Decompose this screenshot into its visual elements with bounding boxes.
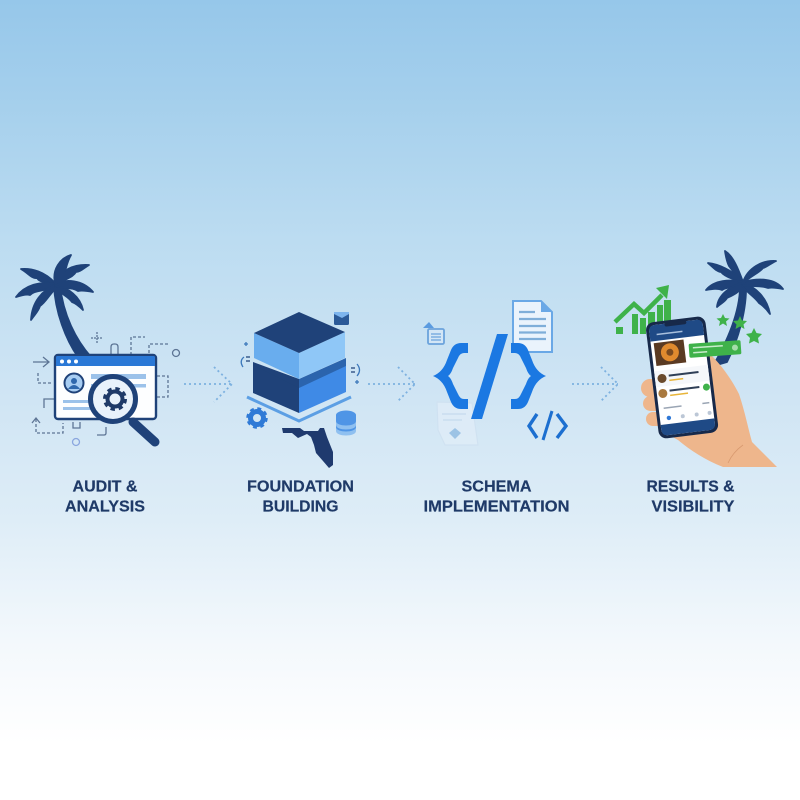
hand xyxy=(641,350,777,467)
code brackets xyxy=(433,343,546,409)
label: foundation building: BUILDING xyxy=(262,498,338,516)
florida map xyxy=(282,428,333,468)
label: results and visibility: RESULTS & xyxy=(646,478,734,496)
code slash xyxy=(471,334,508,419)
dotted arrow 1 xyxy=(184,367,232,402)
small signal marks xyxy=(241,342,360,384)
database icon xyxy=(336,410,356,436)
growth chart with arrow xyxy=(615,285,671,334)
base plate line xyxy=(247,397,351,421)
step 3: schema implementation illustration xyxy=(423,301,566,445)
small code icon xyxy=(529,411,566,440)
step 1: audit and analysis illustration xyxy=(16,255,180,446)
small upload document xyxy=(423,322,444,344)
stars xyxy=(716,314,762,344)
magnifying glass with gear xyxy=(90,376,155,442)
document top right xyxy=(513,301,552,352)
label: foundation building xyxy=(247,478,354,516)
faint document xyxy=(437,402,478,445)
upper block xyxy=(254,312,345,379)
label: audit and analysis xyxy=(65,478,145,516)
label: schema implementation: IMPLEMENTATION xyxy=(424,498,570,516)
palm tree right xyxy=(706,251,783,366)
label: schema implementation xyxy=(424,478,570,516)
browser window xyxy=(55,355,156,419)
label: results and visibility xyxy=(646,478,735,516)
label: audit and analysis: AUDIT & xyxy=(72,478,138,496)
lower block xyxy=(253,358,346,413)
decorative circuit lines xyxy=(32,332,180,446)
label: foundation building: FOUNDATION xyxy=(247,478,354,496)
step 2: foundation building illustration xyxy=(241,312,360,468)
green notification badge xyxy=(689,340,741,358)
mail icon xyxy=(334,312,349,325)
dotted arrow 2 xyxy=(368,367,415,401)
gear icon xyxy=(248,409,266,427)
palm tree left xyxy=(16,255,93,357)
smartphone xyxy=(645,316,719,439)
label: results and visibility: VISIBILITY xyxy=(652,498,735,516)
step 4: results and visibility illustration xyxy=(615,251,783,467)
dotted arrow 3 xyxy=(572,367,618,401)
label: audit and analysis: ANALYSIS xyxy=(65,498,145,516)
label: schema implementation: SCHEMA xyxy=(462,478,532,496)
